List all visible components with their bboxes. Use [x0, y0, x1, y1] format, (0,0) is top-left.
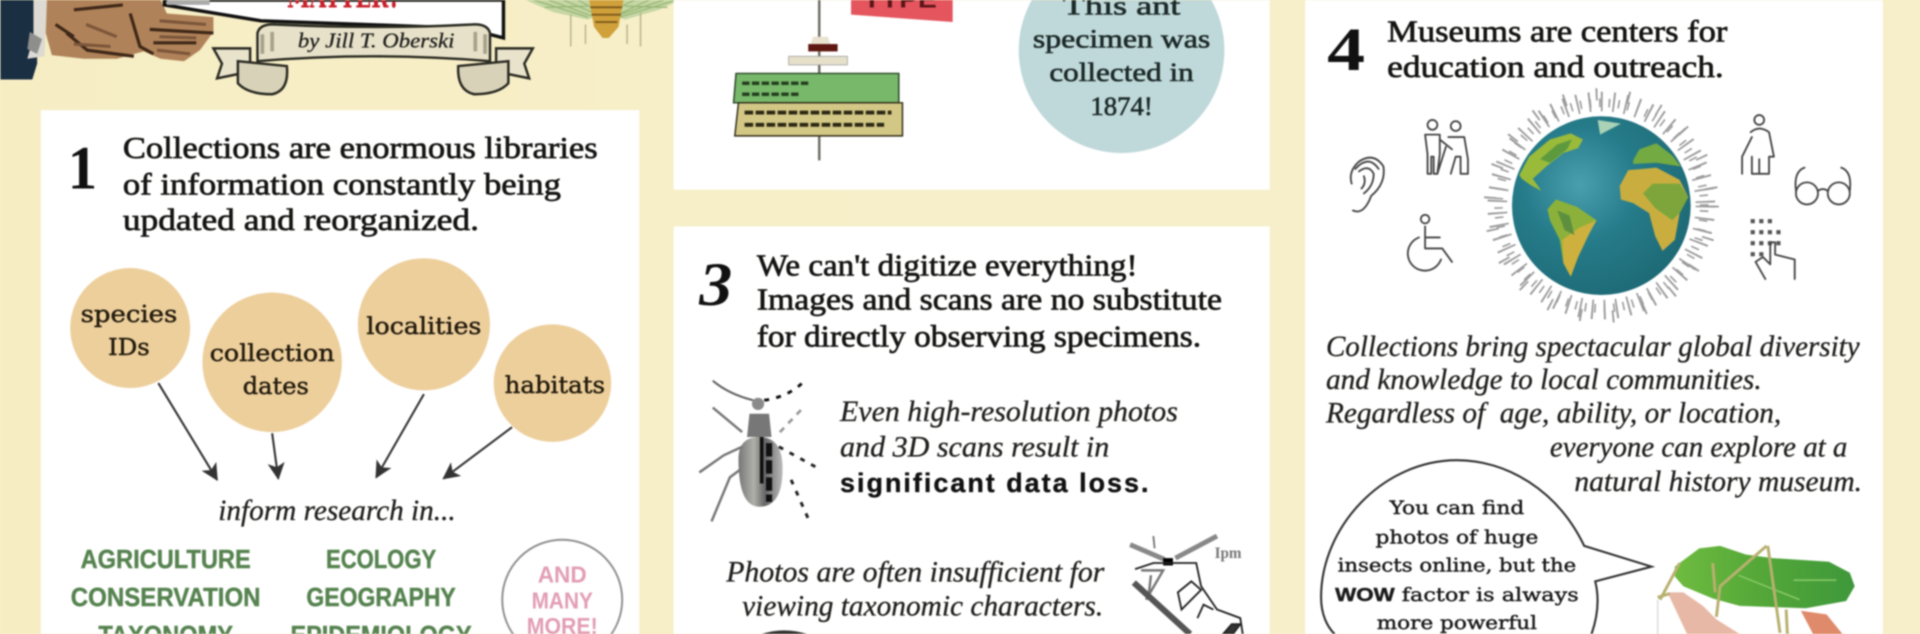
illustration: lacewing insect	[526, 0, 680, 47]
speech bubble: wow factor: WOW factor is always	[1335, 584, 1579, 606]
text: taxonomic characters note: viewing taxonomic characters.	[742, 591, 1103, 623]
text: inform research in: inform research in...	[218, 495, 456, 527]
text: global diversity: Regardless of age, ability, or location,	[1325, 397, 1781, 429]
panel 3: cannot digitize everything	[674, 226, 1270, 634]
circle: species IDs: species	[81, 301, 177, 328]
callout: ant collected in 1874	[1019, 0, 1224, 153]
heading 3: We can't digitize everything!	[757, 248, 1137, 282]
icon: ear	[1351, 158, 1384, 211]
text: global diversity	[1325, 331, 1862, 498]
panel 2: type specimen	[674, 0, 1270, 190]
circle: localities: localities	[366, 313, 481, 340]
text: taxonomic characters note: Photos are often insufficient for	[725, 556, 1105, 588]
callout: ant collected in 1874: 1874!	[1090, 91, 1153, 121]
list: research fields	[71, 546, 472, 634]
continents	[1519, 120, 1688, 277]
text: data loss note	[839, 396, 1178, 498]
heading 3: Images and scans are no substitute	[757, 283, 1222, 317]
speech bubble: wow factor: photos of huge	[1376, 527, 1538, 548]
heading 3: for directly observing specimens.	[757, 319, 1201, 353]
text: data loss note: Even high-resolution photos	[839, 396, 1178, 428]
icon: dark sleeve	[0, 0, 37, 80]
speech bubble: wow factor: You can find	[1388, 498, 1525, 519]
text: global diversity: everyone can explore at a	[1550, 432, 1847, 464]
globe rays	[1490, 94, 1713, 317]
heading 1	[123, 131, 598, 237]
circle: species IDs: IDs	[108, 334, 150, 361]
badge: and many more: MANY	[532, 587, 593, 613]
icon: braille hand	[1751, 219, 1795, 279]
heading 1: Collections are enormous libraries	[123, 131, 598, 165]
heading 4: Museums are centers for	[1387, 15, 1727, 49]
label: type	[851, 0, 953, 22]
katydid legs	[1658, 546, 1787, 634]
circle: collection dates	[202, 293, 342, 432]
number 1: 1	[68, 134, 97, 202]
text: global diversity: natural history museum.	[1574, 466, 1862, 498]
icon: partial specimen at bottom	[762, 630, 807, 634]
illustration: insect structure drawing: Ipm	[1215, 545, 1242, 562]
illustration: hand holding title sign	[0, 0, 503, 80]
heading 3	[757, 248, 1222, 353]
text: global diversity: and knowledge to local communities.	[1326, 364, 1762, 396]
speech bubble: wow factor: more powerful	[1377, 613, 1537, 634]
illustration: insect structure drawing	[1130, 536, 1243, 634]
icon: glasses	[1796, 168, 1850, 204]
icon: elder person	[1742, 115, 1774, 174]
hand fingers	[1667, 592, 1740, 634]
illustration: katydid on hand	[1658, 546, 1855, 634]
callout: ant collected in 1874: specimen was	[1033, 24, 1210, 54]
heading 4	[1387, 15, 1727, 84]
globe	[1512, 116, 1691, 295]
illustration: pinned specimen labels	[734, 0, 902, 160]
circle: localities	[358, 258, 490, 390]
text: global diversity: Collections bring spectacular global diversity	[1326, 331, 1861, 363]
text: taxonomic characters note	[725, 556, 1105, 623]
icon: two people helping	[1425, 120, 1468, 174]
katydid body	[1675, 546, 1855, 608]
speech bubble: wow factor	[1321, 460, 1652, 634]
list: research fields: CONSERVATION	[71, 584, 261, 612]
illustration: globe with rays	[1321, 94, 1862, 634]
heading 1: of information constantly being	[123, 168, 561, 202]
list: research fields: ECOLOGY	[326, 546, 436, 574]
arrows to research	[158, 383, 512, 480]
list: research fields: GEOGRAPHY	[306, 584, 456, 612]
list: research fields: AGRICULTURE	[81, 546, 251, 574]
icon: hand	[46, 0, 213, 61]
panel 1: collections as libraries	[41, 110, 639, 634]
circle: collection dates: dates	[243, 373, 309, 400]
byline text: by Jill T. Oberski	[298, 30, 455, 53]
circle: species IDs	[70, 268, 190, 388]
illustration: beetle with missing data	[699, 381, 817, 521]
text: data loss note: and 3D scans result in	[840, 432, 1109, 464]
number 4: 4	[1327, 16, 1365, 84]
circle: habitats	[494, 324, 611, 442]
circle: collection dates: collection	[210, 340, 335, 367]
speech bubble: wow factor: insects online, but the	[1338, 556, 1576, 577]
icon: wheelchair	[1408, 215, 1452, 271]
banner: author byline	[213, 24, 533, 94]
heading 4: education and outreach.	[1387, 50, 1724, 84]
heading 1: updated and reorganized.	[123, 203, 479, 237]
title sign	[164, 0, 503, 38]
badge: and many more: AND	[538, 562, 587, 588]
circle: habitats: habitats	[505, 372, 605, 399]
text: data loss note: significant data loss.	[840, 468, 1148, 498]
number 3: 3	[698, 251, 732, 319]
badge: and many more	[502, 540, 622, 634]
callout: ant collected in 1874: collected in	[1049, 57, 1194, 87]
panel 4: education and outreach	[1305, 0, 1883, 634]
icon: white shirt cuff	[27, 0, 47, 59]
